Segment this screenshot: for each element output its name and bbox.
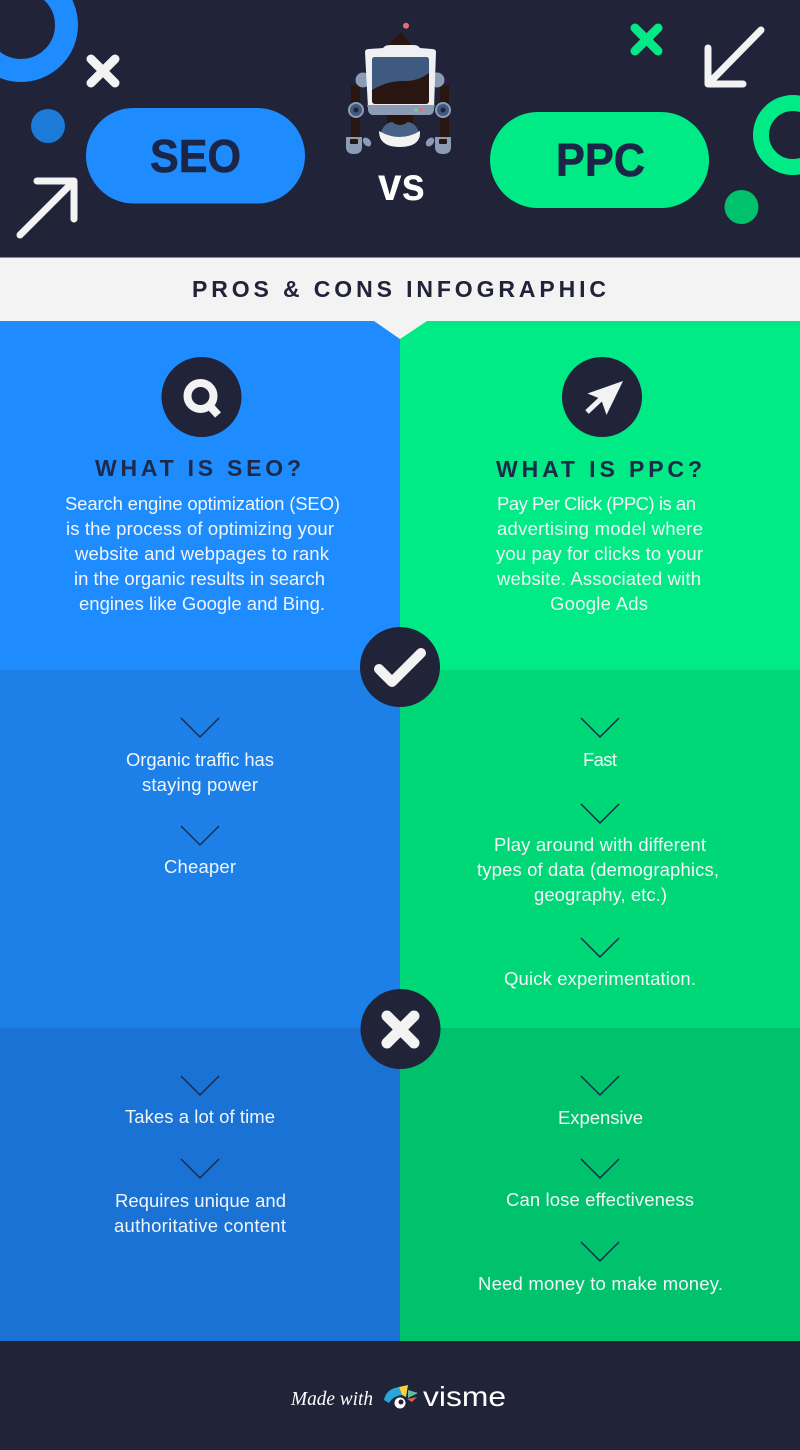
SEO pill [86,108,305,204]
blue dot [31,109,65,143]
panel: PPC cons [400,1028,800,1341]
banner pointer [374,321,427,339]
PPC pill: PPC [556,134,645,186]
icon: search [162,357,242,437]
con item: Takes a lot of time [125,1106,275,1127]
pro item: Organic traffic has [126,749,274,770]
pro item [126,718,274,795]
PPC description: you pay for clicks to your [496,543,703,564]
con item: authoritative content [114,1215,286,1236]
pro item: Play around with different [494,834,706,855]
SEO description: engines like Google and Bing. [79,593,325,614]
SEO description: in the organic results in search [74,568,325,589]
blue ring [0,0,66,70]
arrow up right [20,181,74,235]
PPC description: Pay Per Click (PPC) is an [497,493,696,514]
pro item [164,826,236,877]
SEO pill: SEO [150,130,241,182]
PPC description: website. Associated with [496,568,701,589]
pro item: staying power [142,774,258,795]
vs label: vs [378,158,425,210]
SEO description: Search engine optimization (SEO) [65,493,340,514]
pro item [581,718,619,770]
pro item: Cheaper [164,856,236,877]
con item [114,1159,286,1236]
PPC description: Google Ads [550,593,648,614]
pro item: geography, etc.) [534,884,667,905]
icon: visme logo [384,1385,418,1408]
pro item [477,804,719,905]
panel: SEO pros [0,670,400,1028]
white x mark [91,59,115,83]
title banner [0,258,800,321]
pro item [504,938,696,989]
title banner: PROS & CONS INFOGRAPHIC [192,276,606,302]
con item [125,1076,275,1127]
header panel [0,0,800,258]
pro item: Quick experimentation. [504,968,696,989]
green x mark [635,28,658,51]
heading: what is PPC: WHAT IS PPC? [496,456,702,482]
PPC description: advertising model where [497,518,703,539]
con item: Expensive [558,1107,643,1128]
pro item: types of data (demographics, [477,859,719,880]
con item [558,1076,643,1128]
SEO description: website and webpages to rank [74,543,330,564]
panel: what is SEO [0,321,400,670]
icon: cross badge [360,989,440,1069]
pro item: Fast [583,749,617,770]
con item [506,1159,694,1210]
arrow down left [708,30,761,84]
icon: check badge [360,627,440,707]
panel: PPC pros [400,670,800,1028]
con item: Need money to make money. [478,1273,723,1294]
con item: Requires unique and [115,1190,286,1211]
con item [478,1242,723,1294]
green dot [724,190,758,224]
heading: what is SEO: WHAT IS SEO? [95,455,301,481]
SEO description [65,493,340,614]
SEO description: is the process of optimizing your [66,518,334,539]
green ring [761,103,800,167]
PPC description [496,493,703,614]
icon: cursor arrow [562,357,642,437]
made with label: Made with [290,1388,373,1410]
panel: what is PPC [400,321,800,670]
PPC pill [490,112,709,208]
footer [0,1341,800,1450]
con item: Can lose effectiveness [506,1189,694,1210]
robot illustration [346,23,451,154]
panel: SEO cons [0,1028,400,1341]
visme wordmark: visme [423,1381,506,1412]
